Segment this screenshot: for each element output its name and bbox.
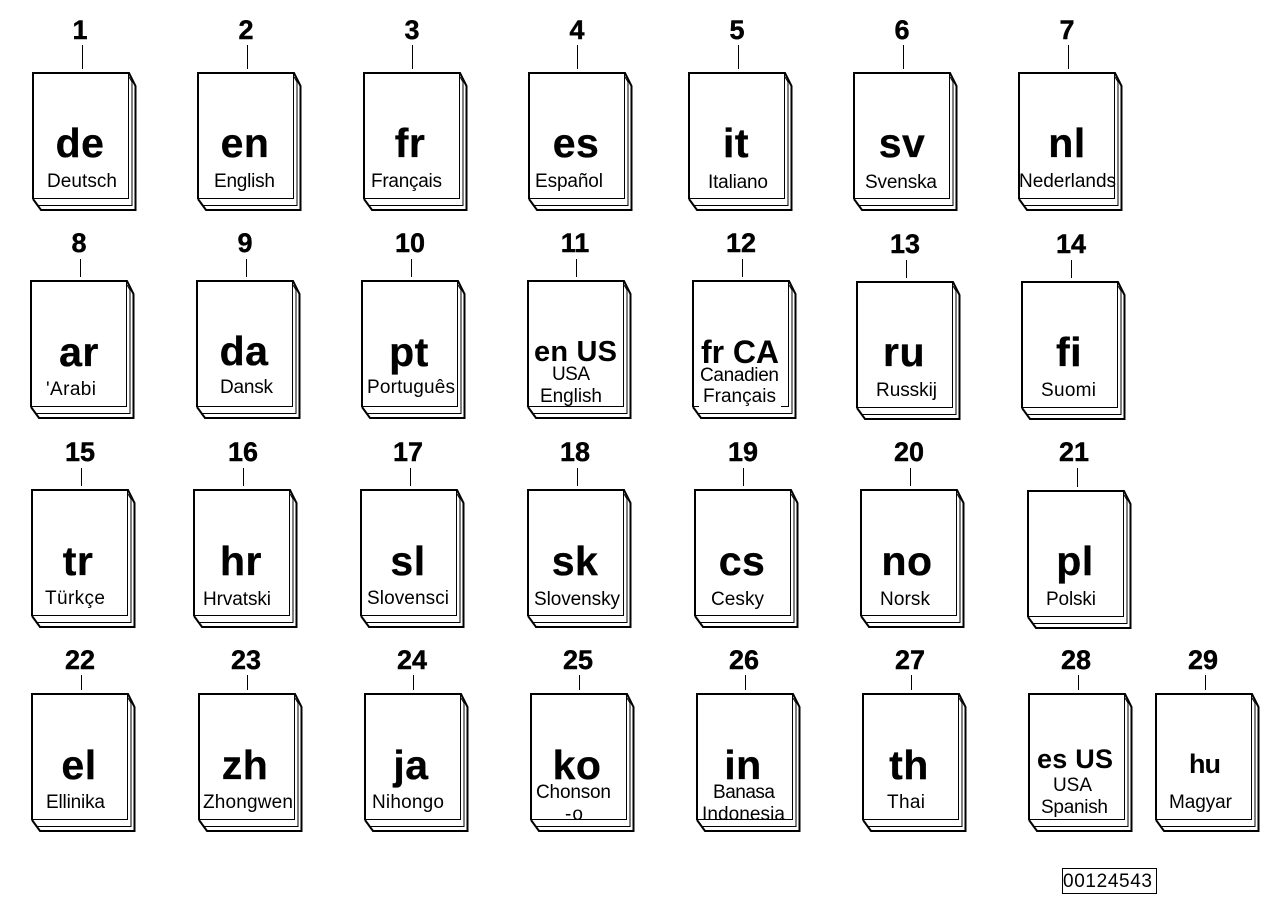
item 6: sv: Svenska	[865, 172, 937, 193]
item 11: en US: USA	[552, 364, 590, 385]
item 18: sk	[528, 437, 630, 627]
item 20: no: Norsk	[880, 589, 930, 610]
item 14: fi: Suomi	[1041, 380, 1096, 401]
item 12: fr CA: Canadien	[700, 365, 779, 386]
item 1: de: 1	[72, 15, 88, 45]
item 9: da	[197, 228, 300, 418]
item 23: zh: 23	[231, 645, 261, 675]
item 9: da: 9	[237, 228, 253, 258]
item 13: ru: Russkij	[876, 380, 937, 401]
item 26: in: Indonesia	[702, 804, 785, 825]
item 17: sl	[361, 437, 464, 627]
item 14: fi: fi	[1056, 329, 1082, 375]
item 24: ja	[365, 645, 468, 831]
item 27: th	[863, 645, 966, 831]
item 2: en	[198, 15, 300, 210]
item 10: pt: 10	[395, 228, 425, 258]
item 19: cs: 19	[728, 437, 758, 467]
item 24: ja: Nihongo	[372, 792, 444, 813]
item 8: ar: 8	[71, 228, 87, 258]
item 23: zh	[199, 645, 302, 831]
item 26: in: in	[724, 742, 762, 788]
item 20: no: 20	[894, 437, 924, 467]
item 27: th: 27	[895, 645, 925, 675]
item 4: es	[529, 15, 632, 210]
item 25: ko: 25	[563, 645, 593, 675]
item 28: es US	[1029, 645, 1132, 831]
item 3: fr	[364, 15, 466, 210]
item 25: ko: Chonson	[536, 782, 611, 803]
item 22: el	[32, 645, 134, 831]
item 11: en US: en US	[534, 336, 617, 368]
item 12: fr CA: 12	[726, 228, 756, 258]
item 20: no	[861, 437, 964, 627]
item 16: hr: 16	[228, 437, 258, 467]
item 10: pt: Português	[367, 377, 455, 398]
item 21: pl	[1028, 437, 1130, 628]
item 2: en: 2	[238, 15, 254, 45]
item 13: ru	[857, 229, 960, 419]
item 6: sv	[854, 15, 956, 210]
item 27: th: th	[889, 742, 929, 788]
item 13: ru: 13	[890, 229, 920, 259]
item 23: zh: zh	[222, 742, 268, 788]
item 22: el: 22	[65, 645, 95, 675]
item 25: ko: -o	[565, 804, 583, 825]
item 6: sv: sv	[879, 120, 925, 166]
item 29: hu: hu	[1189, 749, 1221, 779]
item 11: en US: English	[540, 386, 602, 407]
item 16: hr	[194, 437, 296, 627]
item 16: hr: Hrvatski	[203, 589, 271, 610]
item 20: no: no	[881, 538, 933, 584]
item 15: tr: 15	[65, 437, 95, 467]
item 26: in: Banasa	[713, 782, 775, 803]
item 12: fr CA	[693, 228, 796, 418]
item 22: el: Ellinika	[46, 792, 105, 813]
item 8: ar	[31, 228, 134, 418]
item 29: hu: Magyar	[1169, 792, 1233, 813]
item 1: de: de	[56, 120, 104, 166]
item 9: da: Dansk	[220, 377, 274, 398]
item 2: en: en	[221, 120, 269, 166]
item 5: it: Italiano	[708, 172, 768, 193]
item 17: sl: sl	[390, 538, 426, 584]
item 19: cs: Cesky	[711, 589, 764, 610]
item 28: es US: es US	[1037, 744, 1113, 774]
item 3: fr: Français	[371, 171, 442, 192]
item 22: el: el	[61, 742, 97, 788]
item 8: ar: ar	[59, 329, 99, 375]
item 12: fr CA: fr CA	[701, 334, 779, 370]
item 23: zh: Zhongwen	[203, 792, 293, 813]
item 18: sk: sk	[552, 538, 598, 584]
item 24: ja: 24	[397, 645, 427, 675]
item 1: de: Deutsch	[47, 171, 117, 192]
item 13: ru: ru	[883, 329, 925, 375]
item 9: da: da	[220, 328, 269, 374]
item 5: it: it	[723, 120, 749, 166]
item 11: en US	[528, 228, 630, 418]
item 3: fr: fr	[395, 120, 425, 166]
item 11: en US: 11	[561, 228, 589, 258]
item 28: es US: Spanish	[1041, 797, 1108, 818]
item 19: cs	[695, 437, 798, 627]
item 2: en: English	[214, 171, 275, 192]
item 29: hu	[1156, 645, 1258, 831]
item 3: fr: 3	[404, 15, 420, 45]
item 21: pl: Polski	[1046, 589, 1096, 610]
item 28: es US: 28	[1061, 645, 1091, 675]
item 19: cs: cs	[719, 538, 765, 584]
item 10: pt: pt	[389, 329, 429, 375]
item 1: de	[33, 15, 136, 210]
item 24: ja: ja	[392, 742, 429, 788]
item 25: ko: ko	[553, 742, 601, 788]
item 18: sk: 18	[560, 437, 590, 467]
item 5: it: 5	[729, 15, 745, 45]
item 7: nl	[1019, 15, 1122, 210]
item 21: pl: 21	[1059, 437, 1089, 467]
item 4: es: 4	[569, 15, 585, 45]
item 4: es: Español	[535, 171, 603, 192]
item 14: fi: 14	[1056, 229, 1086, 259]
item 29: hu: 29	[1188, 645, 1218, 675]
reference code box: 00124543	[1063, 871, 1152, 892]
item 16: hr: hr	[220, 538, 262, 584]
item 18: sk: Slovensky	[534, 589, 620, 610]
item 7: nl: Nederlands	[1019, 171, 1116, 192]
item 5: it	[689, 15, 792, 210]
item 25: ko	[531, 645, 634, 831]
item 7: nl: nl	[1048, 120, 1086, 166]
item 12: fr CA: Français	[703, 386, 776, 407]
item 15: tr: tr	[63, 538, 93, 584]
item 6: sv: 6	[894, 15, 910, 45]
item 26: in: 26	[729, 645, 759, 675]
item 4: es: es	[553, 120, 599, 166]
item 14: fi	[1022, 229, 1124, 419]
item 28: es US: USA	[1053, 775, 1092, 796]
item 17: sl: Slovensci	[367, 588, 449, 609]
item 26: in	[697, 645, 800, 831]
item 15: tr	[32, 437, 134, 627]
item 21: pl: pl	[1056, 538, 1094, 584]
item 7: nl: 7	[1059, 15, 1075, 45]
item 17: sl: 17	[393, 437, 423, 467]
item 27: th: Thai	[887, 792, 925, 813]
item 15: tr: Türkçe	[45, 588, 105, 609]
item 8: ar: 'Arabi	[46, 379, 96, 400]
item 10: pt	[362, 228, 464, 418]
